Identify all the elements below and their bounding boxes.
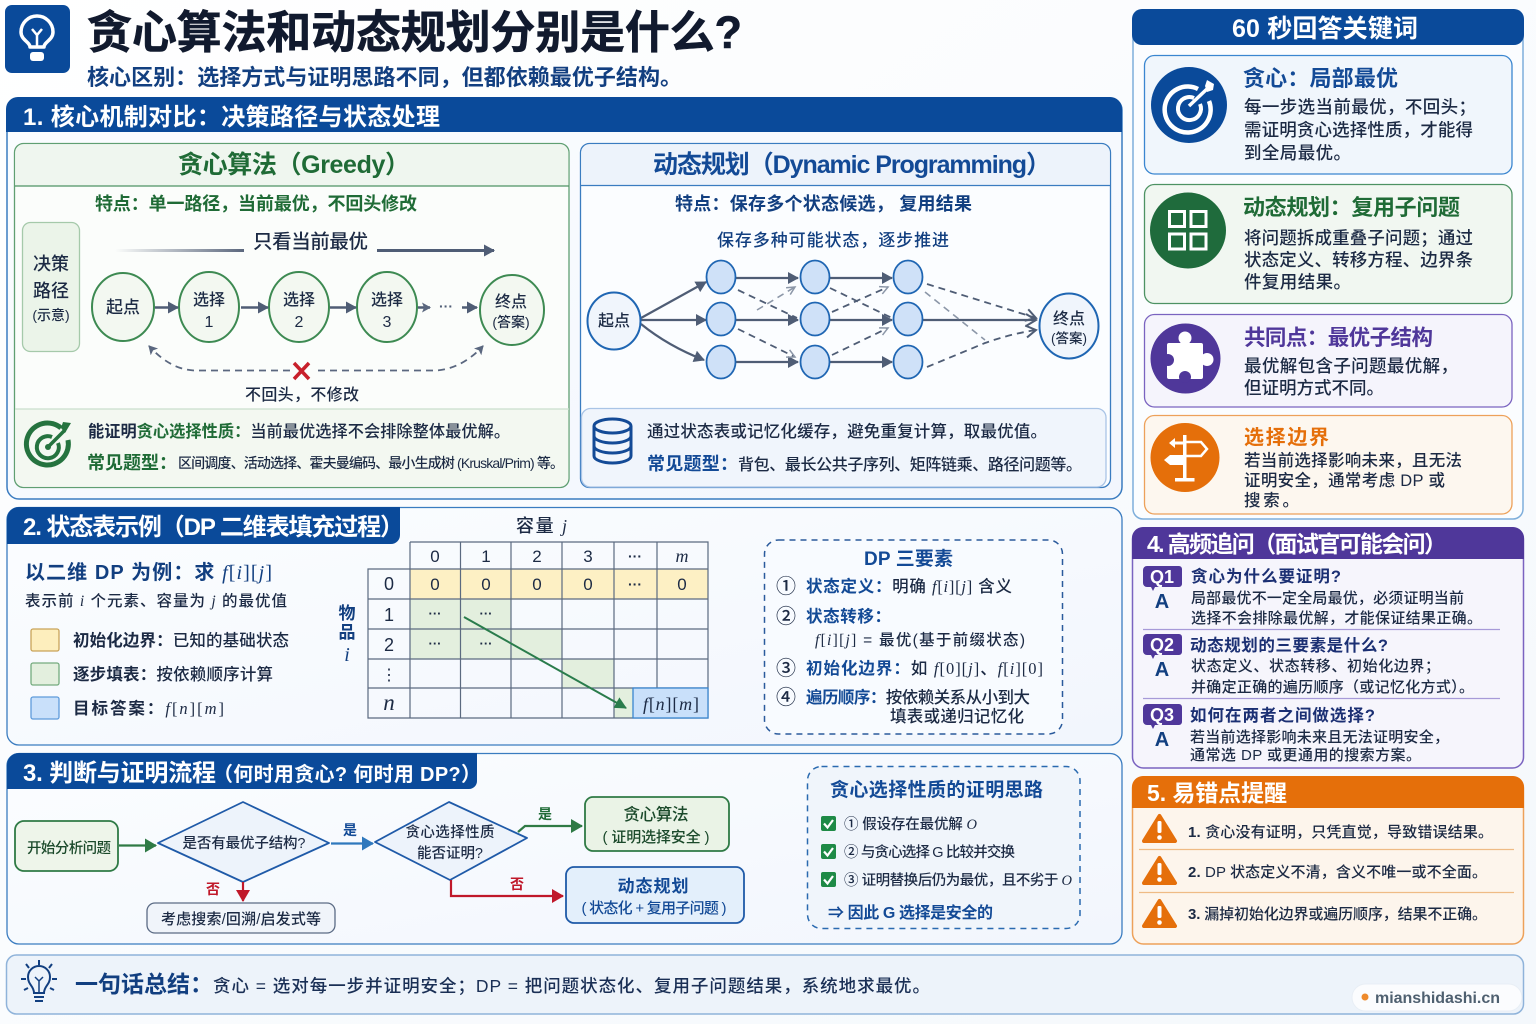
dp table: 0 [677, 575, 687, 594]
panel: one-sentence summary: 贪心 = 选对每一步并证明安全；DP = 把问题状态化、复用子问题结果，系统地求最优。 [213, 976, 930, 996]
card: dp [1144, 184, 1512, 304]
dp table: 0 [384, 574, 394, 594]
flow: greedy path nodes: 起点 [106, 298, 140, 317]
q and a 2: 状态定义、状态转移、初始化边界； [1191, 657, 1440, 675]
dp three elements box: 遍历顺序：按依赖关系从小到大 [806, 687, 1030, 707]
dp table: 1 [384, 605, 394, 625]
card: boundary: 搜索。 [1244, 491, 1299, 510]
q and a 1: 选择不会排除最优解，才能保证结果正确。 [1191, 609, 1482, 627]
card: common: 共同点：最优子结构 [1244, 326, 1433, 350]
left explanation: 以二维 DP 为例：求 f[i][j] [25, 561, 272, 584]
card: dp: 将问题拆成重叠子问题；通过 [1244, 228, 1473, 248]
flow: greedy path nodes: 选择 [371, 291, 403, 309]
keywords header: 60 秒回答关键词 [1232, 15, 1418, 43]
q and a 2: A [1155, 659, 1169, 681]
start box [15, 821, 118, 871]
legend: 逐步填表：按依赖顺序计算 [73, 664, 273, 684]
q and a 3: 如何在两者之间做选择? [1190, 705, 1375, 725]
flow: greedy path nodes: 终点 [495, 293, 527, 311]
decision path label: (示意) [32, 307, 70, 323]
left explanation [25, 561, 287, 610]
chart: dp state graph: 起点 [598, 312, 630, 330]
panel: 5 common mistakes [1132, 776, 1524, 944]
result: dp: ( 状态化 + 复用子问题 ) [582, 899, 726, 917]
table axis labels: 容量 j [516, 516, 567, 536]
arrow: only current best: 只看当前最优 [253, 231, 368, 253]
card: dp: 件复用结果。 [1244, 272, 1351, 292]
flow: greedy path nodes: 选择 [283, 291, 315, 309]
panel: one-sentence summary [6, 955, 1524, 1014]
card: dp: 状态定义、转移方程、边界条 [1244, 250, 1473, 270]
dp three elements box: ④ [776, 686, 796, 709]
dp table [368, 542, 708, 718]
card: boundary [1144, 416, 1512, 514]
dp three elements box: DP 三要素 [864, 548, 953, 570]
arrow: no to search: 否 [206, 881, 220, 897]
dp feature: 特点：保存多个状态候选， 复用结果 [675, 193, 972, 214]
dp three elements box: ② [776, 605, 796, 628]
panel: 60 second keywords [1132, 9, 1524, 519]
greedy proof box: 贪心选择性质的证明思路 [830, 778, 1043, 801]
left explanation: 表示前 i 个元素、容量为 j 的最优值 [25, 591, 287, 610]
card: greedy: 每一步选当前最优，不回头； [1244, 97, 1476, 117]
q and a 3: A [1155, 729, 1169, 751]
dp bottom note: 背包、最长公共子序列、矩阵链乘、路径问题等。 [738, 456, 1082, 474]
arrow: no to dp [451, 876, 563, 896]
dp table: ··· [480, 636, 492, 651]
card: common: 但证明方式不同。 [1244, 378, 1384, 398]
card: common [1144, 314, 1512, 407]
greedy feature: 特点：单一路径，当前最优，不回头修改 [95, 194, 417, 214]
mistake 1 [1144, 816, 1493, 841]
dp heading: 动态规划（Dynamic Programming） [653, 151, 1051, 179]
check items: ① 假设存在最优解 O [844, 816, 978, 833]
arrow: fill direction [464, 617, 626, 708]
dp three elements box [764, 540, 1062, 734]
greedy bottom note: 常见题型： [87, 453, 177, 473]
dp table: 2 [384, 635, 394, 655]
result: dp: 动态规划 [618, 876, 688, 896]
section 2 tab: 2. 状态表示例（DP 二维表填充过程） [23, 514, 404, 541]
card: boundary: 若当前选择影响未来，且无法 [1244, 451, 1462, 470]
decision: greedy choice provable: 贪心选择性质 [406, 824, 494, 841]
greedy proof box [808, 766, 1080, 928]
mistake 2 [1144, 858, 1487, 883]
dp table: 0 [430, 575, 440, 594]
dp bottom note: 通过状态表或记忆化缓存，避免重复计算，取最优值。 [647, 422, 1047, 441]
title: 贪心算法和动态规划分别是什么? [87, 7, 742, 58]
q and a 3: Q3 [1150, 705, 1174, 725]
mistake 1: 1. 贪心没有证明，只凭直觉，导致错误结果。 [1188, 823, 1493, 841]
dp table: ··· [480, 606, 492, 621]
q and a 2 [1143, 634, 1474, 696]
dp bottom note: 常见题型： [647, 454, 738, 474]
q and a 1: 贪心为什么要证明? [1191, 566, 1341, 586]
flow: greedy path nodes: (答案) [492, 314, 530, 330]
dp table: 0 [481, 575, 491, 594]
arrow: no to search [206, 881, 243, 901]
card: greedy: 需证明贪心选择性质，才能得 [1244, 120, 1473, 140]
icon: puzzle [1150, 324, 1220, 394]
website badge: mianshidashi.cn [1375, 990, 1500, 1007]
dp table: n [383, 690, 395, 715]
section 1 header [6, 97, 1122, 132]
dp three elements box: ③ [776, 657, 796, 680]
arrow: yes to decision two: 是 [343, 822, 357, 838]
dp table: ··· [628, 576, 642, 592]
flow: greedy path nodes: 1 [205, 314, 214, 331]
result: greedy [585, 797, 729, 851]
card: boundary: 证明安全，通常考虑 DP 或 [1244, 470, 1445, 490]
dp table: ··· [428, 606, 442, 621]
table axis labels: 物 [338, 604, 356, 623]
arrow: only current best [115, 231, 494, 253]
decision: greedy choice provable: 能否证明? [417, 845, 483, 862]
result: search [147, 903, 335, 933]
dp three elements box: f[i][j] = 最优(基于前缀状态) [815, 631, 1025, 649]
arrow: yes to greedy: 是 [538, 806, 552, 822]
legend: 目标答案：f[n][m] [73, 698, 224, 718]
flow: greedy path nodes: 选择 [193, 291, 225, 309]
check items: ② 与贪心选择 G 比较并交换 [844, 843, 1016, 861]
flowchart [15, 797, 744, 933]
chart: dp state graph: (答案) [1051, 330, 1087, 346]
arrow: yes to decision two [331, 822, 373, 844]
icon: grid [1150, 192, 1226, 268]
flow: greedy path nodes: ··· [439, 298, 453, 314]
q and a 1: A [1155, 591, 1169, 613]
section 5 header [1132, 776, 1524, 808]
flow: greedy path nodes [92, 272, 544, 345]
panel: 4 frequent follow-ups [1132, 527, 1524, 768]
table axis labels: 品 [338, 623, 356, 642]
dp table: 3 [583, 547, 593, 566]
q and a 1: Q1 [1150, 567, 1174, 587]
section 4 header [1132, 527, 1524, 559]
q and a 3: 若当前选择影响未来且无法证明安全， [1190, 728, 1449, 746]
arrow: start to decision one [119, 844, 156, 847]
result: search: 考虑搜索/回溯/启发式等 [161, 910, 321, 928]
dp three elements box: 填表或递归记忆化 [890, 707, 1024, 726]
subtitle: 核心区别：选择方式与证明思路不同，但都依赖最优子结构。 [87, 65, 682, 90]
mistake 2: 2. DP 状态定义不清，含义不唯一或不全面。 [1188, 863, 1487, 881]
dp three elements box: 状态转移： [806, 606, 891, 626]
decision: greedy choice provable [375, 802, 527, 880]
dp table: 2 [532, 547, 542, 566]
icon: target [1151, 67, 1227, 143]
check items: ③ 证明替换后仍为最优，且不劣于 O [844, 871, 1073, 889]
section 3 tab: 3. 判断与证明流程 [23, 760, 216, 787]
section 4 header: 4. 高频追问（面试官可能会问） [1147, 531, 1447, 557]
dp table: m [676, 546, 688, 566]
section 5 header: 5. 易错点提醒 [1147, 780, 1287, 806]
greedy bottom note: 区间调度、活动选择、霍夫曼编码、最小生成树 (Kruskal/Prim) 等。 [178, 455, 564, 471]
decision path label: 决策 [33, 254, 69, 274]
dp table: 0 [430, 547, 440, 566]
decision path label: 路径 [33, 281, 69, 301]
section 1 header: 1. 核心机制对比：决策路径与状态处理 [23, 104, 440, 131]
q and a 2: Q2 [1150, 635, 1174, 655]
header [5, 5, 742, 90]
panel: 3 decision and proof flow [7, 753, 1122, 944]
decision: optimal substructure: 是否有最优子结构? [182, 835, 306, 852]
dp table: ··· [428, 636, 442, 651]
panel: 2 state table example [7, 507, 1122, 745]
card: dp: 动态规划：复用子问题 [1243, 195, 1460, 220]
dp subheading: 保存多种可能状态，逐步推进 [717, 231, 949, 250]
chart: dp state graph [588, 260, 1098, 378]
mistake 3: 3. 漏掉初始化边界或遍历顺序，结果不正确。 [1188, 905, 1487, 923]
dp three elements box: ① [776, 575, 796, 598]
card: greedy [1144, 56, 1512, 174]
start box: 开始分析问题 [27, 840, 112, 857]
no backtracking dashed arrow: 不回头，不修改 [245, 386, 359, 404]
greedy bottom note [15, 409, 569, 487]
section 3 tab: （何时用贪心? 何时用 DP?） [213, 762, 481, 786]
panel: one-sentence summary: 一句话总结： [75, 971, 213, 997]
flow: greedy path nodes: 3 [383, 314, 392, 331]
panel: greedy [14, 144, 569, 488]
dp table: ··· [628, 548, 642, 564]
card: boundary: 选择边界 [1244, 426, 1329, 449]
icon: outline bulb [21, 960, 57, 1001]
arrow: yes to greedy [518, 806, 582, 832]
mistake 3 [1144, 901, 1487, 926]
legend: 初始化边界：已知的基础状态 [73, 630, 289, 650]
chart: dp state graph: 终点 [1053, 310, 1085, 328]
no backtracking dashed arrow [149, 346, 483, 404]
greedy proof box: ⇒ 因此 G 选择是安全的 [828, 903, 993, 922]
q and a 2: 并确定正确的遍历顺序（或记忆化方式）。 [1191, 678, 1474, 696]
q and a 3 [1143, 704, 1449, 764]
icon: green target [26, 422, 71, 465]
q and a 1 [1143, 566, 1482, 627]
keywords header [1132, 9, 1524, 45]
icon: signpost [1150, 423, 1220, 492]
decision: optimal substructure [158, 802, 329, 882]
card: greedy: 贪心：局部最优 [1243, 66, 1398, 91]
q and a 3: 通常选 DP 或更通用的搜索方案。 [1190, 746, 1421, 764]
greedy bottom note: 能证明贪心选择性质：当前最优选择不会排除整体最优解。 [88, 422, 510, 441]
dp table: 1 [481, 547, 491, 566]
legend [31, 629, 289, 719]
icon: database [594, 419, 631, 463]
flow: greedy path nodes: 2 [295, 314, 304, 331]
q and a 1: 局部最优不一定全局最优，必须证明当前 [1191, 589, 1464, 607]
panel: dynamic programming [580, 144, 1111, 488]
result: greedy: ( 证明选择安全 ) [602, 828, 710, 846]
decision path label [22, 222, 80, 352]
check items [821, 816, 1073, 889]
icon: light bulb [5, 5, 70, 73]
dp table: f[n][m] [643, 694, 699, 714]
card: greedy: 到全局最优。 [1244, 143, 1351, 163]
dp table: ⋮ [381, 667, 397, 684]
result: greedy: 贪心算法 [624, 805, 688, 824]
dp bottom note [582, 408, 1106, 487]
dp three elements box: 状态定义：明确 f[i][j] 含义 [806, 576, 1012, 596]
q and a 2: 动态规划的三要素是什么? [1190, 635, 1388, 655]
result: dp [566, 867, 744, 923]
table axis labels [338, 516, 567, 666]
dp table: 0 [583, 575, 593, 594]
section 3 tab [7, 753, 481, 789]
website badge [1352, 984, 1522, 1011]
dp table: 0 [532, 575, 542, 594]
card: common: 最优解包含子问题最优解， [1244, 356, 1458, 376]
arrow: no to dp: 否 [510, 876, 524, 892]
table axis labels: i [344, 644, 350, 666]
greedy heading: 贪心算法（Greedy） [178, 151, 410, 179]
dp three elements box: 初始化边界：如 f[0][j]、f[i][0] [806, 658, 1043, 678]
